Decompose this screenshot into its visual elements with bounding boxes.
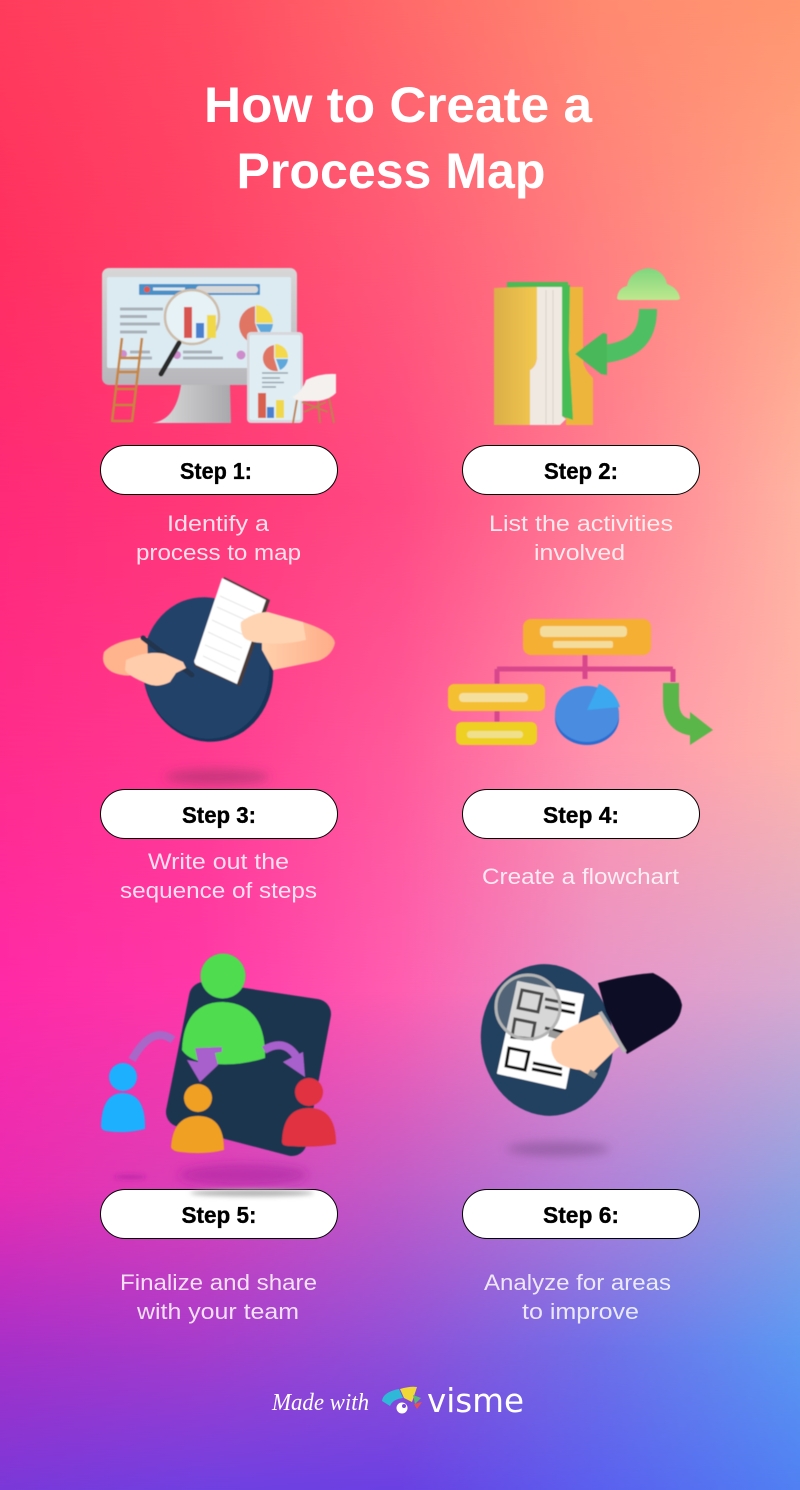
top box bbox=[523, 619, 651, 655]
floating shadow bbox=[506, 1142, 610, 1156]
right arm bbox=[262, 612, 335, 670]
step 5 pill bbox=[100, 1190, 338, 1238]
panel: step 3 bbox=[100, 577, 338, 903]
step 4 pill: Step 4: bbox=[543, 802, 619, 828]
step 1 caption bbox=[136, 511, 301, 565]
magnifying glass bbox=[161, 290, 219, 374]
green arrow bbox=[575, 309, 648, 375]
left arm bbox=[103, 637, 148, 676]
ladder bbox=[112, 338, 142, 422]
step 1 pill bbox=[100, 446, 338, 494]
step 6 pill: Step 6: bbox=[543, 1202, 619, 1228]
pen bbox=[143, 638, 192, 675]
step 6 pill bbox=[462, 1190, 700, 1238]
step 2 caption: involved bbox=[534, 540, 625, 565]
pie chart bbox=[555, 684, 620, 745]
sleeve bbox=[598, 973, 682, 1054]
title bbox=[204, 77, 593, 199]
step 5 caption: with your team bbox=[136, 1299, 299, 1324]
step 5 caption bbox=[120, 1270, 317, 1324]
hand bbox=[551, 1014, 620, 1075]
step 2 pill: Step 2: bbox=[544, 458, 618, 484]
step 3 pill bbox=[100, 790, 338, 838]
step 4 pill bbox=[462, 790, 700, 838]
magnifier bbox=[496, 975, 562, 1039]
step 3 caption: Write out the bbox=[148, 849, 289, 874]
step 2 pill bbox=[462, 446, 700, 494]
icon: folder with book and arrow bbox=[494, 268, 680, 425]
step 3 caption: sequence of steps bbox=[120, 878, 317, 903]
green arrow bbox=[671, 683, 713, 745]
red person bbox=[282, 1078, 336, 1147]
step 2 caption: List the activities bbox=[489, 511, 673, 536]
bottom box bbox=[456, 722, 537, 745]
step 1 caption: process to map bbox=[136, 540, 301, 565]
step 1 caption: Identify a bbox=[167, 511, 270, 536]
pie chart on monitor bbox=[239, 305, 273, 344]
panel: step 6 bbox=[462, 956, 700, 1324]
icon: hands holding tablet over disc bbox=[103, 577, 335, 785]
panel: step 5 bbox=[100, 954, 338, 1324]
checklist paper bbox=[498, 982, 583, 1088]
icon: team people with arrows bbox=[101, 954, 336, 1186]
step 1 pill: Step 1: bbox=[180, 458, 252, 484]
chair bbox=[292, 374, 336, 423]
orange person bbox=[171, 1084, 224, 1153]
step 6 caption bbox=[484, 1270, 671, 1324]
right hand bbox=[241, 612, 306, 644]
panel: step 2 bbox=[462, 268, 700, 565]
title: How to Create a bbox=[204, 77, 593, 133]
purple arrows bbox=[132, 1035, 305, 1082]
icon: flowchart bbox=[448, 619, 713, 745]
step 5 pill: Step 5: bbox=[182, 1202, 256, 1228]
green person bbox=[182, 954, 265, 1064]
footer: made with visme bbox=[271, 1381, 524, 1420]
step 3 caption bbox=[120, 849, 317, 903]
step 3 pill: Step 3: bbox=[182, 802, 256, 828]
left hand bbox=[125, 653, 186, 686]
dark rounded card bbox=[181, 997, 316, 1141]
cloud bbox=[617, 268, 680, 300]
icon: monitor with charts bbox=[102, 268, 336, 423]
cuff bbox=[600, 1012, 625, 1052]
icon: hand with magnifier over checklist bbox=[471, 956, 682, 1156]
tablet bbox=[194, 577, 270, 686]
step 6 caption: Analyze for areas bbox=[484, 1270, 671, 1295]
left box bbox=[448, 684, 545, 711]
step 6 caption: to improve bbox=[522, 1299, 639, 1324]
floating shadow bbox=[165, 769, 269, 785]
connectors bbox=[497, 655, 673, 722]
step 5 caption: Finalize and share bbox=[120, 1270, 317, 1295]
step 4 caption: Create a flowchart bbox=[482, 864, 679, 889]
panel: step 4 bbox=[448, 619, 713, 889]
footer: made with visme: Made with bbox=[271, 1390, 369, 1416]
blue person bbox=[101, 1063, 145, 1132]
icon: visme logo bbox=[382, 1387, 422, 1414]
title: Process Map bbox=[236, 143, 546, 199]
footer: made with visme: visme bbox=[427, 1381, 524, 1420]
floating shadows bbox=[178, 1164, 308, 1186]
step 2 caption bbox=[489, 511, 673, 565]
tablet bbox=[247, 332, 303, 423]
panel: step 1 bbox=[100, 268, 338, 565]
